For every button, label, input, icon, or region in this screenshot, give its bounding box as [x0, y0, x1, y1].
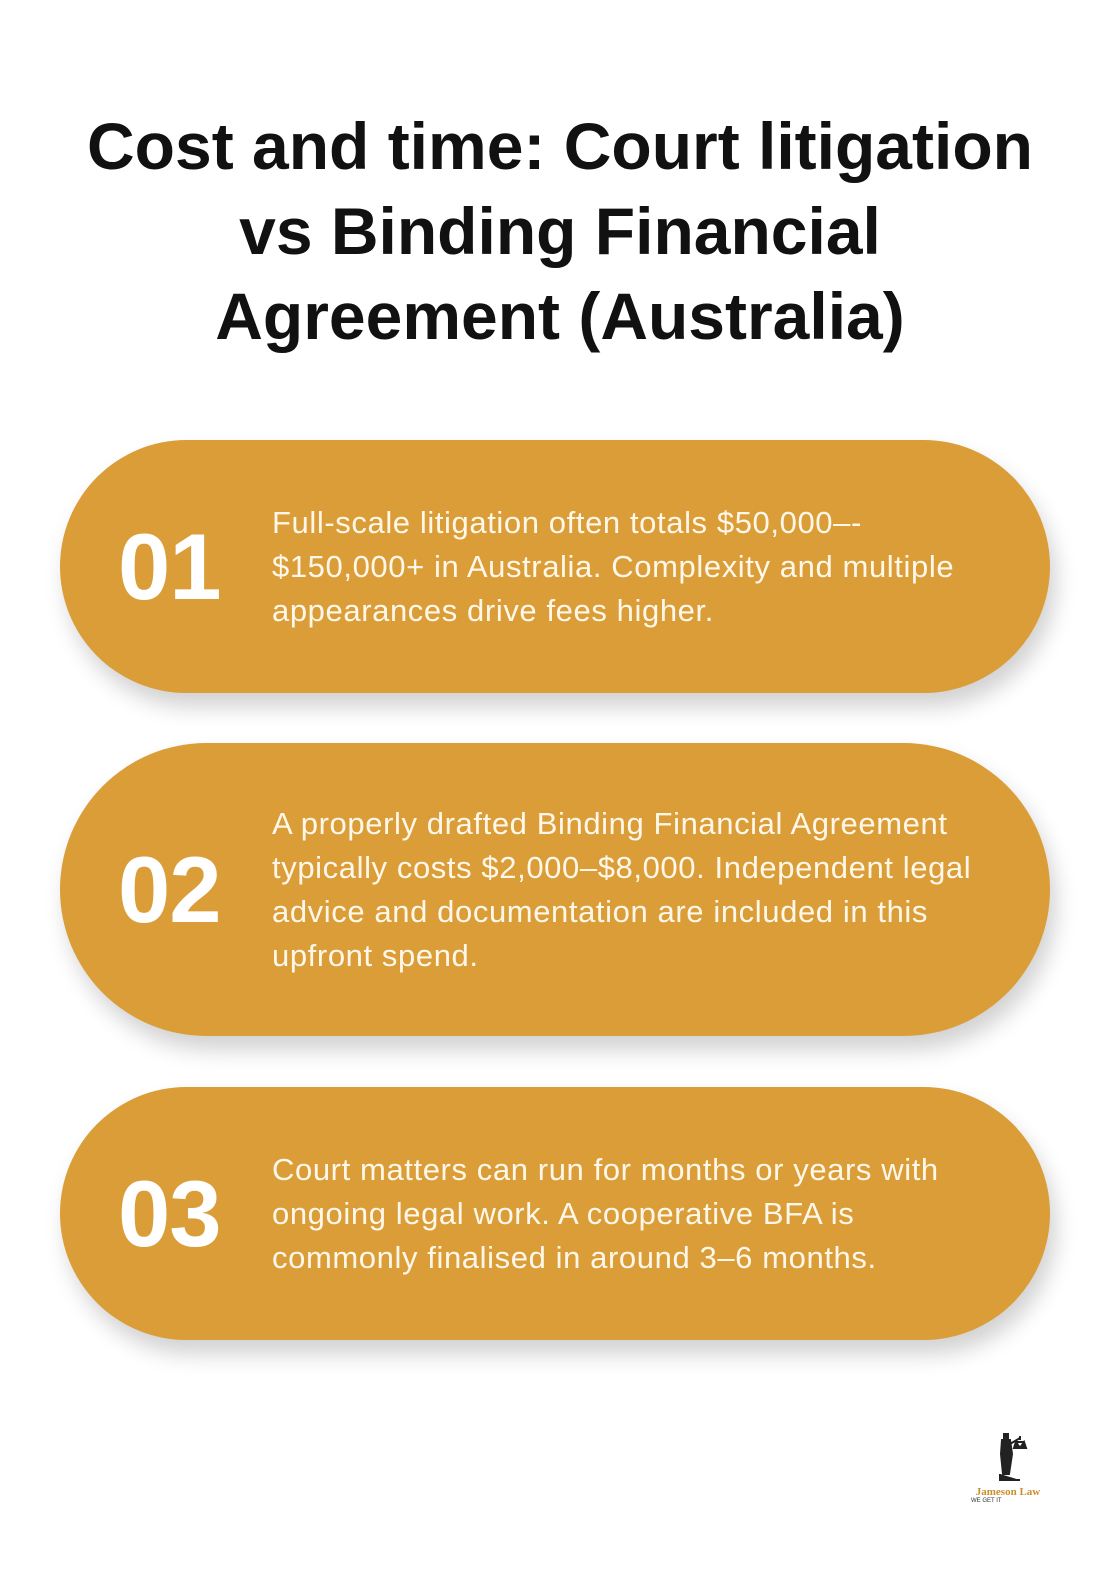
- number 03: 03: [118, 1160, 221, 1266]
- number 01: 01: [118, 514, 221, 618]
- text 02: typically costs $2,000–$8,000. Independent legal: [272, 850, 971, 884]
- icon: lady justice: [999, 1433, 1028, 1481]
- text 03: commonly finalised in around 3–6 months.: [272, 1240, 877, 1274]
- title: Cost and time: Court litigation: [87, 109, 1033, 183]
- panel: 01: [60, 440, 1050, 693]
- panel: 02: [60, 743, 1050, 1036]
- text 01: Full-scale litigation often totals $50,000–-: [272, 504, 862, 540]
- text 02: [272, 806, 971, 972]
- text 01: $150,000+ in Australia. Complexity and multiple: [272, 548, 954, 584]
- logo: [971, 1433, 1040, 1504]
- logo: WE GET IT: [971, 1498, 1002, 1504]
- title: vs Binding Financial: [239, 194, 881, 268]
- logo text: Jameson Law: [976, 1486, 1040, 1498]
- text 02: A properly drafted Binding Financial Agreement: [272, 806, 948, 840]
- panel: 03: [60, 1087, 1050, 1340]
- text 03: ongoing legal work. A cooperative BFA is: [272, 1196, 854, 1230]
- title: [87, 109, 1033, 353]
- text 03: [272, 1152, 939, 1274]
- text 03: Court matters can run for months or years with: [272, 1152, 939, 1186]
- text 01: [272, 504, 954, 628]
- title: Agreement (Australia): [215, 279, 905, 353]
- text 02: advice and documentation are included in this: [272, 894, 928, 928]
- number 02: 02: [118, 836, 221, 942]
- text 02: upfront spend.: [272, 938, 479, 972]
- text 01: appearances drive fees higher.: [272, 592, 714, 628]
